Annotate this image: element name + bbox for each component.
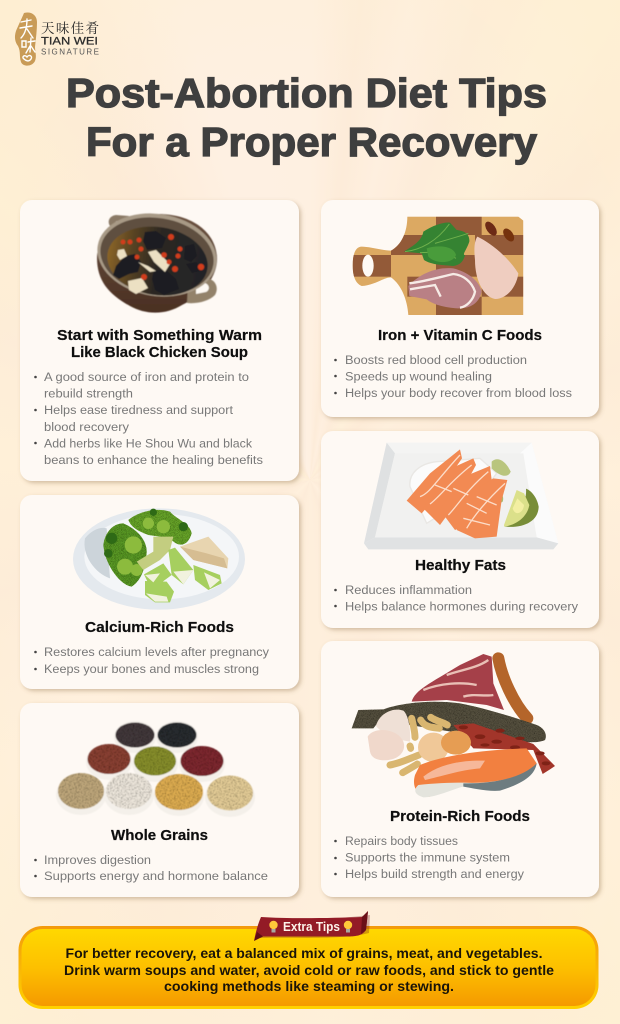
bullet list bbox=[334, 353, 572, 400]
heading: Protein-Rich Foods bbox=[390, 809, 530, 825]
panel: calcium-rich foods bbox=[20, 495, 299, 689]
heading bbox=[57, 328, 262, 361]
icon: cutting board with meat and spinach bbox=[350, 213, 527, 317]
logo subline: SIGNATURE bbox=[41, 48, 99, 56]
callout text: cooking methods like steaming or stewing. bbox=[164, 979, 454, 994]
bullet list: Repairs body tissues bbox=[345, 834, 458, 848]
bullet list: Reduces inflammation bbox=[345, 583, 472, 597]
icon: grain bowls bbox=[56, 721, 255, 817]
callout text: Drink warm soups and water, avoid cold or raw foods, and stick to gentle bbox=[64, 963, 554, 978]
heading: Like Black Chicken Soup bbox=[71, 345, 248, 361]
card background bbox=[321, 431, 599, 628]
heading: Calcium-Rich Foods bbox=[85, 620, 234, 636]
bullet list bbox=[34, 645, 270, 676]
callout box bbox=[18, 926, 598, 1009]
bullet list bbox=[334, 834, 525, 881]
bullet list: Improves digestion bbox=[44, 853, 151, 867]
card background bbox=[20, 495, 299, 689]
icon: light bulb right bbox=[344, 921, 352, 932]
bullet list: Helps balance hormones during recovery bbox=[345, 600, 579, 614]
bullet list: beans to enhance the healing benefits bbox=[44, 453, 263, 467]
heading: Whole Grains bbox=[111, 828, 208, 844]
logo wordmark: TIAN WEI bbox=[41, 36, 98, 48]
heading: Healthy Fats bbox=[415, 558, 506, 574]
soup contents bbox=[113, 231, 200, 295]
bullet list: A good source of iron and protein to bbox=[44, 370, 249, 384]
bullet list: Boosts red blood cell production bbox=[345, 353, 527, 367]
callout text bbox=[64, 946, 554, 994]
title: For a Proper Recovery bbox=[86, 119, 537, 165]
ribbon banner bbox=[254, 911, 370, 941]
logo script marks bbox=[20, 19, 35, 61]
heading: Start with Something Warm bbox=[57, 328, 262, 344]
bullet list: Helps build strength and energy bbox=[345, 867, 525, 881]
panel: black chicken soup bbox=[20, 200, 299, 481]
icon: soup pot bbox=[91, 205, 223, 313]
logo Chinese name: 天味佳肴 bbox=[41, 17, 99, 37]
logo bbox=[15, 12, 99, 66]
panel: protein-rich foods bbox=[321, 641, 599, 897]
card background bbox=[20, 200, 299, 481]
heading: Iron + Vitamin C Foods bbox=[378, 328, 542, 344]
card background bbox=[20, 703, 299, 897]
panel: whole grains bbox=[20, 703, 299, 897]
callout: extra tips bbox=[18, 911, 598, 1009]
card background bbox=[321, 200, 599, 417]
bullet list: Supports the immune system bbox=[345, 850, 510, 864]
bullet list: Keeps your bones and muscles strong bbox=[44, 662, 259, 676]
icon: protein food pile bbox=[352, 654, 555, 797]
bullet list: blood recovery bbox=[44, 420, 130, 434]
title: Post-Abortion Diet Tips bbox=[66, 70, 547, 116]
callout text: For better recovery, eat a balanced mix of grains, meat, and vegetables. bbox=[66, 946, 542, 961]
card background bbox=[321, 641, 599, 897]
panel: iron and vitamin C foods bbox=[321, 200, 599, 417]
icon: light bulb left bbox=[269, 921, 278, 932]
bullet list: Restores calcium levels after pregnancy bbox=[44, 645, 270, 659]
bullet list: Speeds up wound healing bbox=[345, 370, 492, 384]
ribbon label: Extra Tips bbox=[283, 920, 340, 934]
bullet list bbox=[34, 370, 263, 467]
bullet list bbox=[334, 583, 579, 614]
icon: logo brush mark bbox=[15, 12, 37, 66]
title bbox=[66, 70, 547, 165]
bullet list: rebuild strength bbox=[44, 386, 133, 400]
bullet list: Add herbs like He Shou Wu and black bbox=[44, 436, 253, 450]
bullet list bbox=[34, 853, 268, 883]
icon: salmon plate with avocado bbox=[364, 443, 558, 549]
icon: broccoli plate bbox=[73, 508, 245, 610]
bullet list: Helps ease tiredness and support bbox=[44, 403, 234, 417]
panel: healthy fats bbox=[321, 431, 599, 628]
bullet list: Helps your body recover from blood loss bbox=[345, 386, 572, 400]
bullet list: Supports energy and hormone balance bbox=[44, 869, 268, 883]
